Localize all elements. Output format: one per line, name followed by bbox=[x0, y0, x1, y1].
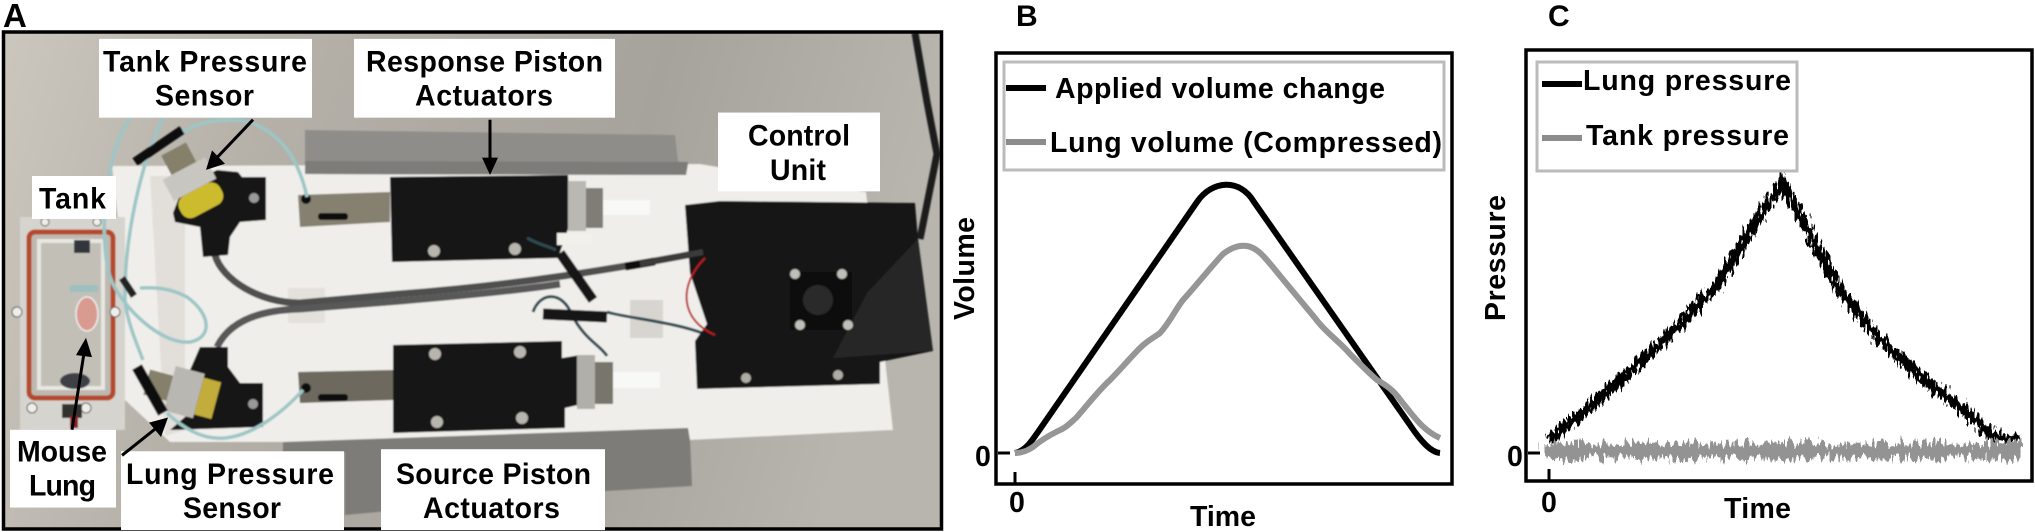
label: tank bbox=[32, 176, 116, 219]
panel letter C: C bbox=[1548, 0, 1570, 33]
curve: lung pressure bbox=[1549, 183, 2017, 440]
arrow: mouse lung bbox=[72, 338, 92, 430]
cable entering control unit bbox=[640, 252, 703, 264]
source actuator bbox=[393, 341, 580, 433]
coloured wires bbox=[527, 238, 712, 356]
labels and arrows over the photo bbox=[10, 39, 880, 530]
label: tank pressure sensor: Tank Pressure bbox=[103, 46, 307, 79]
x axis zero tick and label bbox=[1541, 469, 1557, 519]
encoders and shafts bbox=[568, 181, 586, 231]
legend: Applied volume change bbox=[1055, 73, 1385, 105]
label: response piston actuators bbox=[354, 39, 615, 118]
y axis zero tick and label: 0 bbox=[1507, 441, 1523, 473]
arrow: lung pressure sensor bbox=[122, 418, 168, 455]
label: lung pressure sensor: Lung Pressure bbox=[126, 459, 334, 491]
legend bbox=[1537, 62, 1797, 171]
panel C: pressure chart bbox=[1480, 50, 2032, 525]
panel B: volume chart bbox=[949, 53, 1452, 532]
label: source piston actuators: Actuators bbox=[423, 493, 560, 525]
legend: Tank pressure bbox=[1586, 120, 1789, 152]
sensor mounts bbox=[173, 170, 266, 257]
plot frame bbox=[996, 53, 1452, 484]
grey signal cable bbox=[215, 252, 703, 303]
plot frame bbox=[1526, 50, 2032, 481]
curve: lung volume bbox=[1015, 246, 1440, 453]
label: source piston actuators bbox=[381, 449, 605, 530]
legend: Lung pressure bbox=[1583, 65, 1791, 97]
label: tank pressure sensor bbox=[99, 39, 312, 118]
bottom tape strip bbox=[283, 428, 692, 515]
label: control unit bbox=[718, 113, 880, 191]
pneumatic tubes bbox=[125, 118, 163, 360]
arrow: tank pressure sensor bbox=[206, 120, 253, 170]
legend: Lung volume (Compressed) bbox=[1050, 127, 1442, 159]
label: mouse lung: Mouse bbox=[17, 436, 107, 469]
external black cable bbox=[915, 33, 937, 239]
curve: tank pressure bbox=[1544, 444, 2021, 458]
x axis zero tick and label: 0 bbox=[1541, 487, 1557, 519]
y axis title: Volume bbox=[949, 217, 981, 320]
cable tie bbox=[288, 288, 325, 323]
x axis zero tick and label bbox=[1009, 472, 1025, 519]
label: tank: Tank bbox=[39, 183, 107, 216]
frame of photo bbox=[4, 32, 942, 529]
y axis zero tick and label: 0 bbox=[975, 441, 991, 473]
y axis zero tick and label bbox=[975, 441, 1010, 473]
panel letter B: B bbox=[1016, 0, 1038, 33]
rails bbox=[298, 192, 390, 227]
tank bbox=[12, 217, 125, 430]
top sensor body bbox=[152, 138, 228, 222]
response actuator bbox=[390, 175, 570, 262]
y axis title: Pressure bbox=[1480, 195, 1512, 321]
label: control unit: Unit bbox=[770, 155, 826, 187]
label: response piston actuators: Response Piston bbox=[366, 46, 603, 79]
label: tank pressure sensor: Sensor bbox=[155, 80, 254, 112]
label: mouse lung bbox=[10, 430, 116, 508]
wire plugs bbox=[543, 314, 607, 317]
label: mouse lung: Lung bbox=[29, 470, 96, 502]
top tape strip bbox=[305, 130, 688, 175]
curve: applied volume change bbox=[1015, 185, 1440, 453]
photo background bbox=[3, 31, 942, 528]
y axis zero tick and label bbox=[1507, 441, 1540, 473]
label: response piston actuators: Actuators bbox=[415, 80, 553, 112]
x axis title: Time bbox=[1724, 493, 1791, 525]
label: lung pressure sensor bbox=[121, 451, 344, 530]
legend bbox=[1004, 62, 1444, 170]
label: control unit: Control bbox=[748, 120, 850, 152]
label: source piston actuators: Source Piston bbox=[396, 459, 591, 491]
control unit housing bbox=[685, 201, 933, 389]
fan bbox=[790, 272, 852, 330]
arrow: response piston actuators bbox=[482, 120, 498, 175]
photo contents bbox=[12, 33, 937, 515]
white base board bbox=[112, 164, 893, 442]
panel A: photograph of the apparatus bbox=[3, 31, 942, 529]
tube connectors bbox=[135, 130, 182, 162]
x axis zero tick and label: 0 bbox=[1009, 487, 1025, 519]
label: lung pressure sensor: Sensor bbox=[183, 493, 281, 525]
red wire bbox=[687, 258, 715, 335]
wire clip bbox=[630, 300, 663, 338]
bottom sensor body bbox=[141, 360, 222, 423]
